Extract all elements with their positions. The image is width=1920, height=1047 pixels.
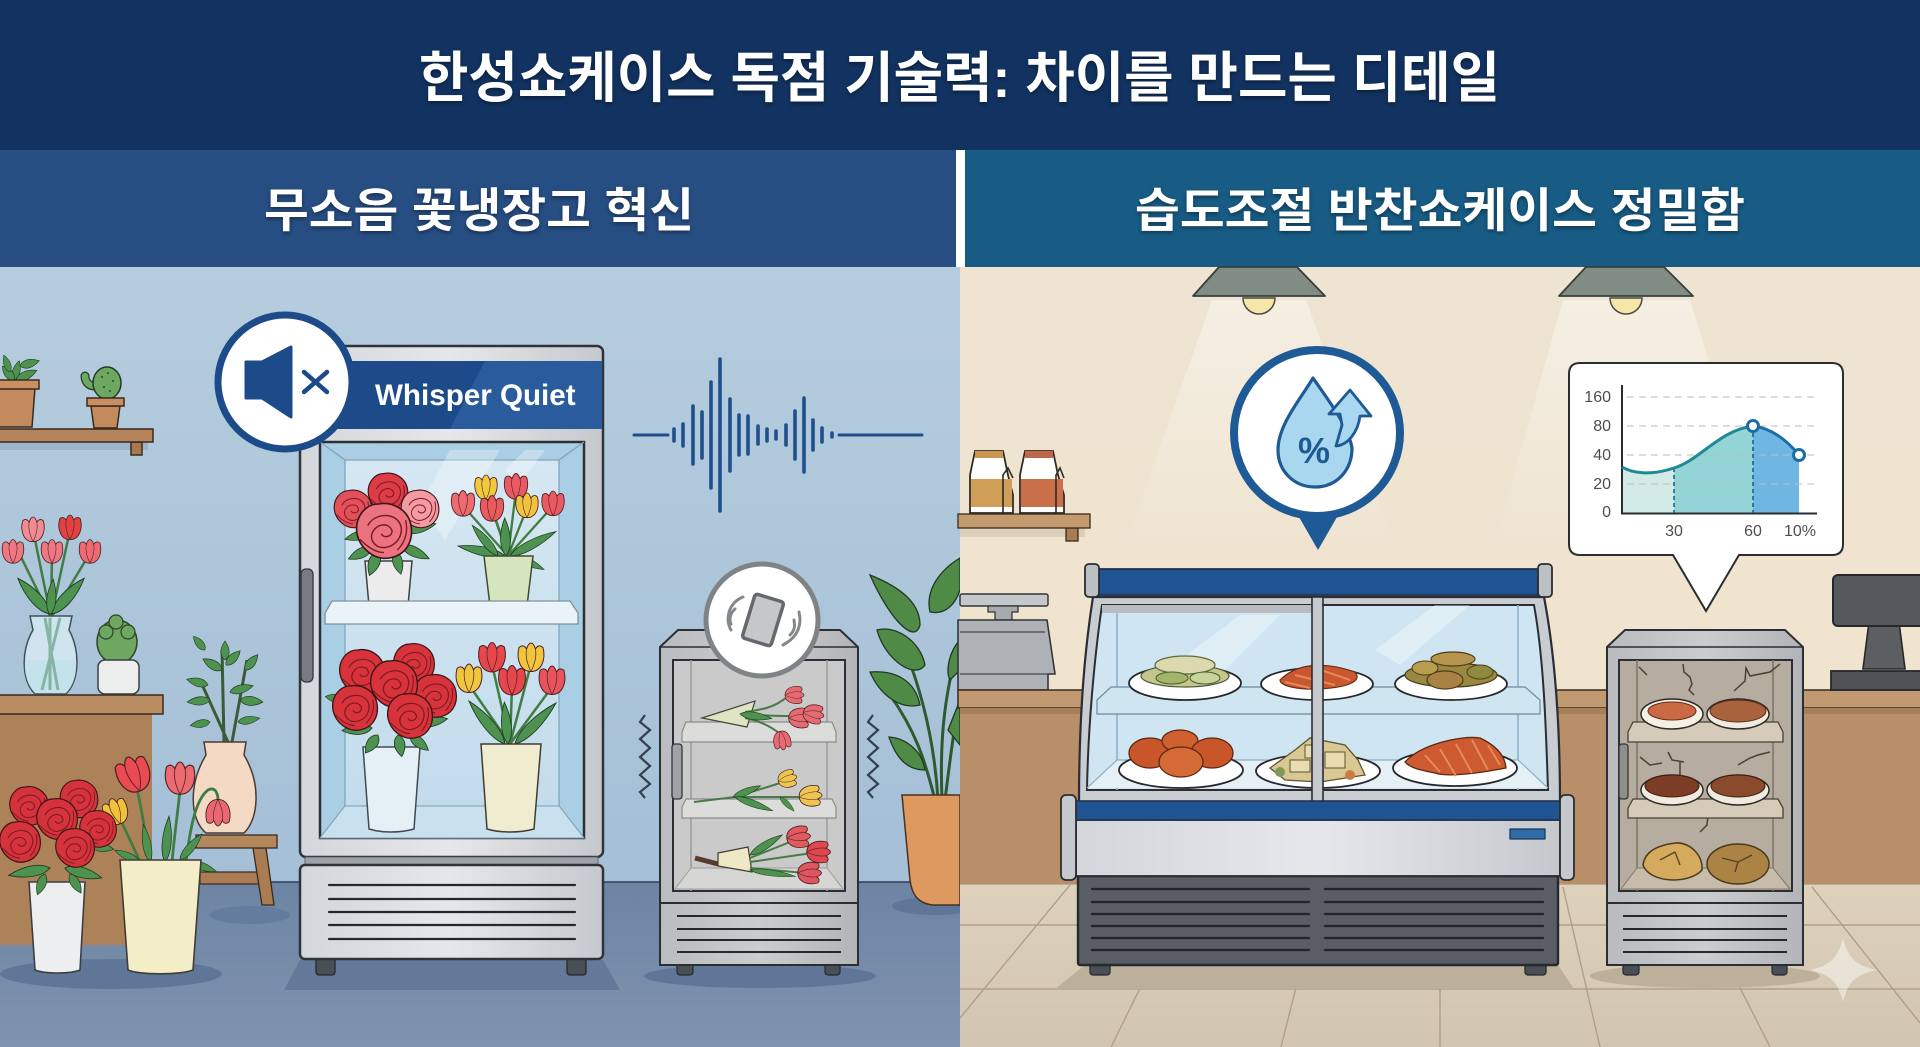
shelf with jars	[958, 451, 1090, 541]
handle	[1619, 744, 1628, 799]
y axis labels: 160	[1584, 389, 1611, 406]
large silent flower refrigerator	[284, 346, 620, 990]
pendant lamp right	[1559, 267, 1693, 314]
main title: 한성쇼케이스 독점 기술력: 차이를 만드는 디테일	[419, 47, 1500, 109]
humidity control banchan showcase	[1055, 564, 1574, 989]
right heading: 습도조절 반찬쇼케이스 정밀함	[1135, 184, 1745, 237]
small fridge middle shelf	[682, 799, 836, 818]
pendant lamp left	[1193, 267, 1325, 314]
lower red roses bouquet	[325, 644, 456, 832]
bench	[196, 835, 290, 924]
panel: banchan shop scene	[958, 267, 1920, 1047]
small fridge top shelf	[682, 722, 836, 742]
small fridge feet	[677, 960, 840, 975]
dried plates	[1641, 699, 1769, 884]
icon: corner sparkle	[1810, 938, 1876, 1002]
crack lines	[1639, 664, 1780, 832]
chart markers and curve	[1622, 420, 1804, 513]
center divider	[956, 150, 965, 267]
plate: red kimchi strips	[1261, 665, 1373, 700]
weighing scale	[958, 594, 1055, 690]
right section header	[965, 150, 1920, 267]
showcase shadow	[1590, 964, 1820, 988]
terracotta pot	[902, 795, 960, 905]
icon: vibrating phone badge	[706, 564, 818, 676]
vibration marks	[640, 715, 878, 798]
icon: muted speaker badge	[218, 315, 352, 449]
wilted tulips on bottom	[695, 825, 830, 884]
fridge handle	[301, 569, 313, 682]
wall shelf with potted plants	[0, 354, 153, 455]
interior	[1619, 660, 1792, 891]
x axis labels: 10%	[1784, 523, 1816, 540]
plate: kimchi rolls	[1119, 730, 1243, 788]
whisper quiet banner	[337, 361, 602, 429]
showcase lower vents	[1078, 876, 1558, 965]
body	[1607, 630, 1803, 965]
wilted tulips on middle shelf	[694, 768, 823, 814]
y axis labels: 40	[1593, 447, 1611, 464]
upper tulip bouquet	[451, 474, 564, 608]
sound waveform	[634, 359, 922, 511]
y axis labels: 20	[1593, 476, 1611, 493]
wilted tulips on top shelf	[702, 686, 825, 751]
small cactus in white pot	[97, 615, 139, 694]
cracked dried showcase	[1590, 630, 1820, 988]
POS terminal	[1831, 575, 1920, 690]
plate: red fish	[1393, 737, 1517, 786]
small fridge body	[660, 630, 858, 965]
showcase glass interior	[1087, 605, 1548, 790]
showcase shadow	[1055, 965, 1574, 989]
leafy plant in peach vase	[186, 634, 263, 833]
percent sign: %	[1298, 430, 1330, 471]
showcase front panel	[1061, 795, 1574, 880]
plate: brown rolled pancakes	[1395, 652, 1507, 700]
counter	[958, 690, 1920, 884]
counter	[0, 695, 163, 945]
water drop	[1278, 378, 1352, 487]
plate: tofu mix	[1256, 738, 1380, 788]
chart axes	[1622, 385, 1817, 514]
small fridge base	[660, 903, 858, 965]
floor tile lines	[960, 884, 1920, 1047]
y axis labels: 0	[1602, 504, 1611, 521]
jar	[970, 451, 1013, 513]
upper pink roses bouquet	[334, 473, 439, 608]
shelves	[1628, 722, 1783, 742]
title band	[0, 0, 1920, 150]
small fridge shadow	[644, 964, 876, 988]
x axis labels: 30	[1665, 523, 1683, 540]
icon: humidity bubble	[1234, 350, 1400, 550]
y axis labels	[1584, 389, 1611, 521]
lower tulip bouquet	[456, 642, 565, 832]
upper plates	[1129, 652, 1507, 700]
white vase of red roses	[0, 780, 116, 973]
y axis labels: 80	[1593, 418, 1611, 435]
lower plates	[1119, 730, 1517, 788]
callout: humidity chart	[1569, 363, 1843, 611]
glass shelf	[1097, 687, 1540, 714]
fridge cabinet	[300, 346, 603, 857]
light cones	[1120, 300, 1770, 560]
whisper quiet banner: Whisper Quiet	[375, 379, 576, 412]
chart area fills	[1622, 426, 1799, 513]
large potted plant	[870, 558, 978, 915]
glass shelf	[325, 601, 578, 624]
showcase feet	[1090, 960, 1546, 975]
rising arrow	[1329, 390, 1371, 446]
showcase top bar	[1085, 564, 1552, 597]
plate: sliced vegetables	[1129, 656, 1241, 700]
base with vents	[1607, 903, 1803, 965]
small vibrating refrigerator	[644, 630, 876, 988]
small fridge handle	[672, 744, 682, 799]
fridge glass interior	[320, 442, 584, 838]
x axis labels: 60	[1744, 523, 1762, 540]
left section header	[0, 150, 956, 267]
x axis labels	[1665, 523, 1816, 540]
panel: flower shop scene	[0, 267, 978, 1047]
fridge feet	[316, 957, 586, 975]
small fridge interior	[673, 660, 845, 891]
center glass post	[1312, 597, 1323, 802]
cream bucket of tulips	[100, 752, 230, 974]
glass vase of tulips	[2, 515, 101, 694]
fridge base with vents	[300, 865, 603, 959]
jar	[1020, 451, 1064, 513]
feet	[1623, 960, 1787, 975]
curved glass frame	[1079, 597, 1560, 803]
floor shadow under buckets	[0, 959, 222, 989]
fridge shadow	[284, 960, 620, 990]
left heading: 무소음 꽃냉장고 혁신	[264, 184, 694, 237]
chart grid lines	[1627, 397, 1817, 484]
